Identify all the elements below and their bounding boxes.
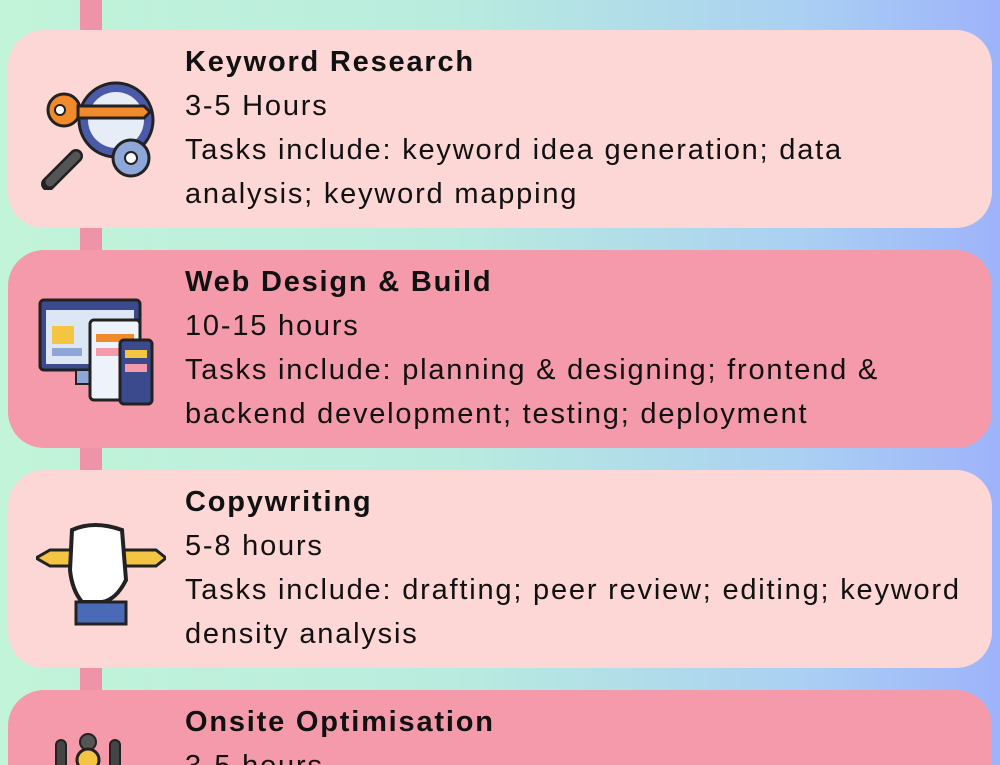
text: onsite optimisation: [185, 706, 495, 765]
icon: sliders: [55, 733, 121, 765]
text: copywriting: [185, 486, 961, 650]
text: keyword research: Tasks include: keyword idea generation; data: [185, 134, 843, 166]
text: copywriting: Tasks include: drafting; peer review; editing; keyword: [185, 574, 961, 606]
text: keyword research: Keyword Research: [185, 46, 475, 78]
text: web design: Tasks include: planning & designing; frontend &: [185, 354, 879, 386]
text: onsite optimisation: Onsite Optimisation: [185, 706, 495, 738]
text: copywriting: density analysis: [185, 618, 419, 650]
text: keyword research: 3-5 Hours: [185, 90, 329, 122]
icon: key magnifier gear: [41, 82, 154, 190]
text: web design: 10-15 hours: [185, 310, 360, 342]
card: keyword research: [8, 30, 992, 228]
card: onsite optimisation: [8, 690, 992, 765]
text: web design: Web Design & Build: [185, 266, 492, 298]
text: keyword research: analysis; keyword mapping: [185, 178, 578, 210]
icon: hand with pencil: [36, 523, 166, 626]
text: copywriting: Copywriting: [185, 486, 372, 518]
text: copywriting: 5-8 hours: [185, 530, 324, 562]
text: web design: backend development; testing; deployment: [185, 398, 808, 430]
card: web design: [8, 250, 992, 448]
icon: devices: [38, 298, 154, 406]
card: copywriting: [8, 470, 992, 668]
text: web design: [185, 266, 879, 430]
text: keyword research: [185, 46, 843, 210]
